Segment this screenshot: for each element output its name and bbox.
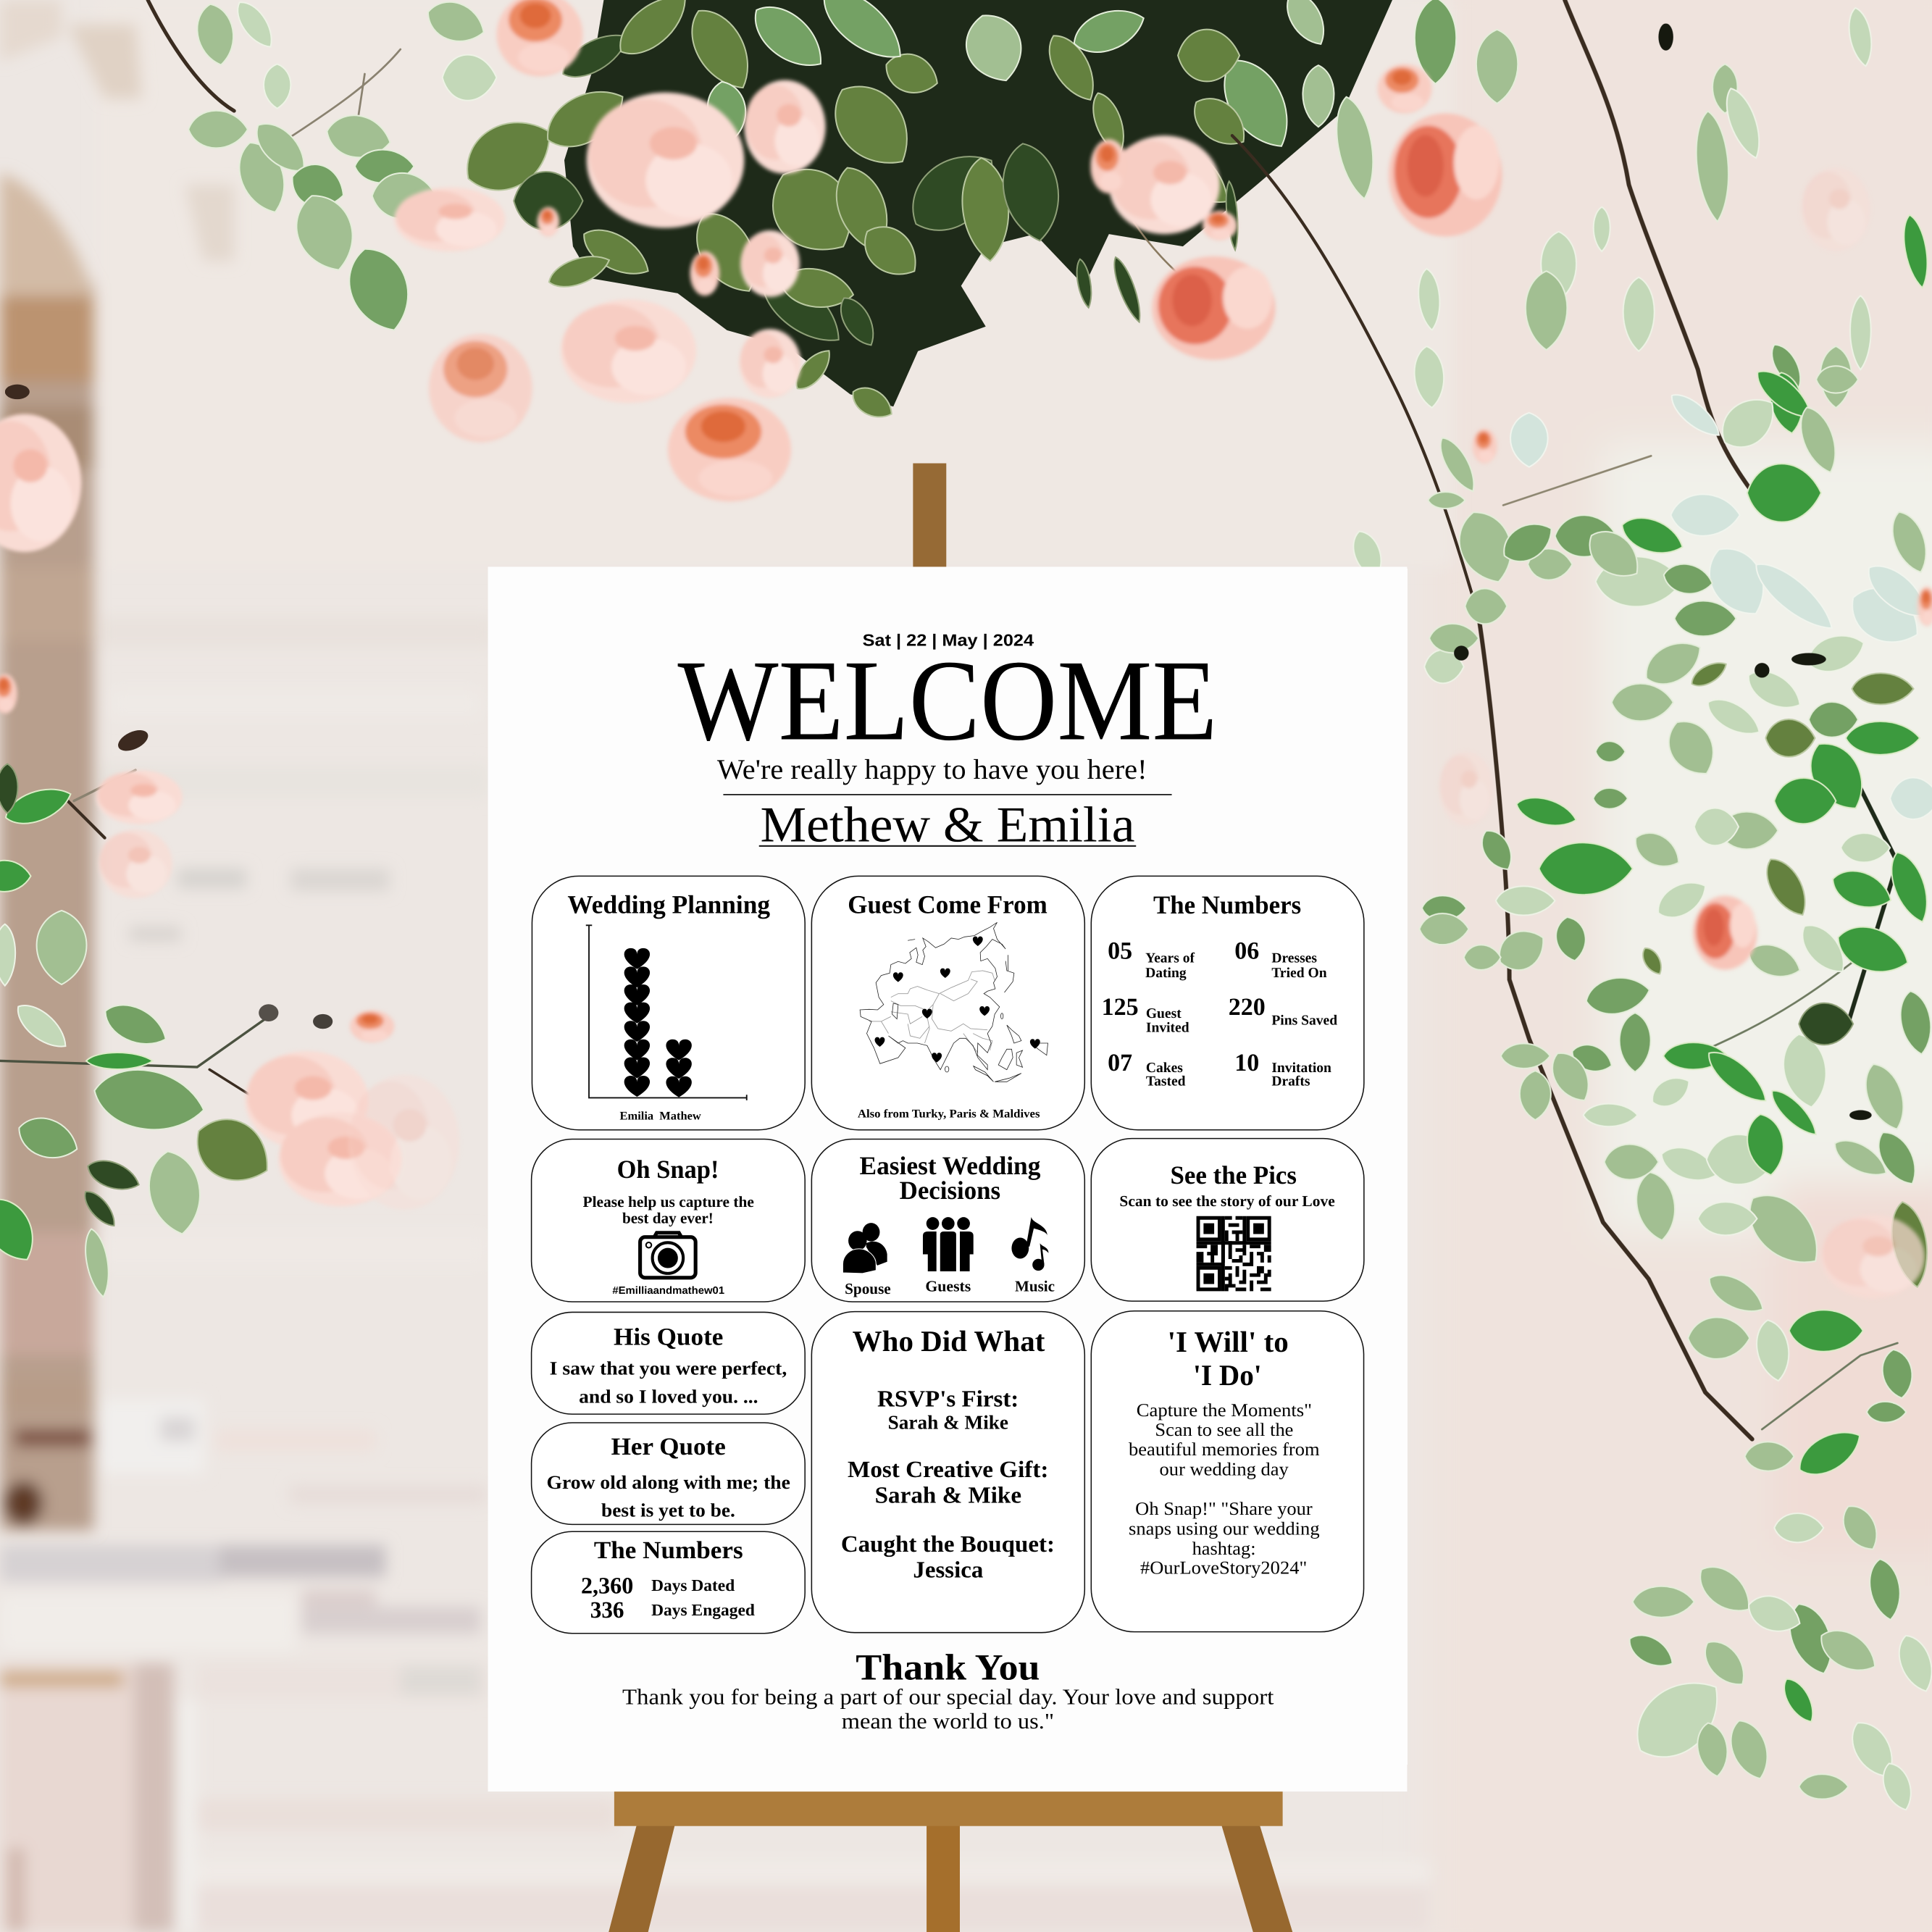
- map footnote: Also from Turky, Paris & Maldives: [858, 1109, 1040, 1121]
- stat: invitation drafts: Invitation: [1271, 1061, 1332, 1076]
- hanging floral arrangement, top: [148, 0, 1518, 616]
- stat: days dated: Days Dated: [651, 1576, 735, 1594]
- capture the moments text: Scan to see all the: [1155, 1421, 1294, 1441]
- thank you message: Thank you for being a part of our special day. Your love and support: [622, 1684, 1274, 1709]
- share your snaps text: #OurLoveStory2024": [1140, 1559, 1307, 1578]
- stat: invitation drafts: 10: [1234, 1050, 1259, 1077]
- panel: easiest wedding decisions: [811, 1139, 1084, 1302]
- share your snaps text: hashtag:: [1192, 1539, 1256, 1560]
- stat: invitation drafts: Drafts: [1271, 1074, 1310, 1090]
- panel: see the pics: [1091, 1139, 1364, 1301]
- heading: Oh Snap!: [617, 1155, 719, 1184]
- heading: Wedding Planning: [567, 890, 771, 919]
- share your snaps text: [1129, 1500, 1321, 1578]
- stat: dresses tried on: [1234, 937, 1328, 981]
- welcome subtitle: We're really happy to have you here!: [717, 754, 1147, 785]
- stat: years of dating: [1108, 937, 1195, 981]
- stat: days engaged: [590, 1598, 756, 1623]
- capture the moments text: beautiful memories from: [1129, 1441, 1320, 1460]
- heading: See the Pics: [1171, 1161, 1297, 1189]
- stat: pins saved: [1229, 994, 1338, 1028]
- award: caught the bouquet: Jessica: [913, 1557, 984, 1584]
- panel: I will to I do: [1091, 1311, 1364, 1632]
- panel: the numbers (days): [532, 1531, 805, 1634]
- heading: His Quote: [614, 1323, 724, 1351]
- stat: years of dating: Years of: [1145, 951, 1195, 966]
- quote: [550, 1358, 787, 1408]
- thank you message: mean the world to us.": [842, 1709, 1054, 1734]
- award: caught the bouquet: Caught the Bouquet:: [841, 1532, 1055, 1557]
- label: spouse: Spouse: [845, 1280, 891, 1297]
- stat: guest invited: Invited: [1146, 1021, 1190, 1036]
- stat: cakes tasted: 07: [1108, 1050, 1132, 1077]
- stat: years of dating: 05: [1108, 937, 1132, 965]
- heading: [860, 1151, 1041, 1205]
- heading: The Numbers: [1153, 890, 1301, 920]
- chart axes: [586, 925, 747, 1100]
- heading: 'I Do': [1193, 1360, 1262, 1392]
- capture the moments text: our wedding day: [1160, 1460, 1289, 1480]
- stat: invitation drafts: [1234, 1050, 1332, 1090]
- award: caught the bouquet: [841, 1532, 1055, 1584]
- heart bars: Emilia: [624, 948, 650, 1097]
- panel: oh snap: [532, 1139, 805, 1302]
- capture the moments text: [1129, 1401, 1320, 1480]
- white sign board: [488, 566, 1407, 1791]
- thank you heading: Thank You: [856, 1647, 1040, 1689]
- easel right leg: [1221, 1823, 1292, 1932]
- scan instruction: Scan to see the story of our Love: [1119, 1192, 1336, 1210]
- stat: dresses tried on: 06: [1234, 937, 1259, 965]
- easel ledge: [614, 1791, 1283, 1826]
- stat: days engaged: 336: [590, 1598, 624, 1623]
- heading: The Numbers: [594, 1537, 743, 1565]
- stat: guest invited: 125: [1102, 994, 1139, 1021]
- award: most creative gift: Most Creative Gift:: [848, 1458, 1048, 1484]
- share your snaps text: snaps using our wedding: [1129, 1520, 1321, 1539]
- panel: his quote: [532, 1312, 805, 1414]
- stat: pins saved: 220: [1229, 994, 1266, 1021]
- rose stems and foliage, left: [0, 385, 459, 1299]
- stat: cakes tasted: Tasted: [1146, 1074, 1187, 1090]
- panel: guest come from: [811, 876, 1084, 1130]
- icon: spouse: [842, 1223, 887, 1274]
- quote: [547, 1473, 790, 1521]
- award: RSVP's first: [877, 1387, 1019, 1434]
- easel centre leg: [927, 1823, 960, 1932]
- stat: dresses tried on: Dresses: [1271, 951, 1318, 966]
- stat: days dated: 2,360: [581, 1573, 633, 1599]
- couple names with rules: Methew & Emilia: [760, 796, 1135, 853]
- easel top post: [913, 464, 946, 569]
- heart bars: Mathew: [666, 1040, 692, 1097]
- stat: pins saved: Pins Saved: [1271, 1013, 1338, 1028]
- stat: days engaged: Days Engaged: [651, 1600, 756, 1619]
- label: music: Music: [1015, 1278, 1055, 1295]
- stat: dresses tried on: Tried On: [1271, 966, 1328, 981]
- heading: Guest Come From: [848, 890, 1048, 919]
- climbing branch foliage, right: [1347, 0, 1932, 1814]
- hashtag: #Emilliaandmathew01: [612, 1284, 725, 1296]
- quote: and so I loved you. ...: [579, 1387, 758, 1408]
- quote: best is yet to be.: [601, 1500, 735, 1521]
- map of Asia with hearts: [860, 922, 1048, 1082]
- heading: Her Quote: [611, 1434, 726, 1460]
- main title: WELCOME: [677, 637, 1217, 765]
- heading: Easiest Wedding: [860, 1151, 1041, 1180]
- stat: days dated: [581, 1573, 735, 1599]
- stat: guest invited: [1102, 994, 1190, 1036]
- chart labels: Emilia Mathew: [620, 1111, 701, 1124]
- quote: I saw that you were perfect,: [550, 1358, 787, 1379]
- capture the moments text: Capture the Moments": [1137, 1401, 1312, 1421]
- request text: [583, 1193, 755, 1226]
- panel: the numbers (top): [1091, 876, 1364, 1130]
- easel left leg: [609, 1823, 675, 1932]
- panel: her quote: [532, 1423, 805, 1524]
- stat: cakes tasted: [1108, 1050, 1187, 1090]
- wooden easel: [609, 464, 1292, 1932]
- panel: wedding planning: [532, 876, 805, 1130]
- heading: 'I Will' to: [1168, 1327, 1289, 1359]
- stat: years of dating: Dating: [1145, 966, 1187, 981]
- heading: Who Did What: [853, 1326, 1045, 1358]
- award: RSVP's first: RSVP's First:: [877, 1387, 1019, 1413]
- award: RSVP's first: Sarah & Mike: [888, 1413, 1008, 1434]
- award: most creative gift: Sarah & Mike: [875, 1484, 1021, 1509]
- thank you message: [622, 1684, 1274, 1734]
- icon: camera: [640, 1233, 695, 1278]
- panel: who did what: [811, 1312, 1084, 1633]
- QR code: [1197, 1216, 1271, 1291]
- label: guests: Guests: [925, 1278, 971, 1295]
- share your snaps text: Oh Snap!" "Share your: [1135, 1500, 1313, 1520]
- stat: guest invited: Guest: [1146, 1007, 1182, 1021]
- request text: best day ever!: [622, 1210, 714, 1226]
- stat: cakes tasted: Cakes: [1146, 1061, 1184, 1076]
- request text: Please help us capture the: [583, 1193, 755, 1210]
- quote: Grow old along with me; the: [547, 1473, 790, 1494]
- icon: music notes: [1011, 1217, 1048, 1271]
- award: most creative gift: [848, 1458, 1048, 1509]
- heading: Decisions: [900, 1176, 1000, 1205]
- heading: [1168, 1327, 1289, 1392]
- date line: Sat | 22 | May | 2024: [863, 631, 1034, 649]
- icon: guests: [923, 1217, 974, 1271]
